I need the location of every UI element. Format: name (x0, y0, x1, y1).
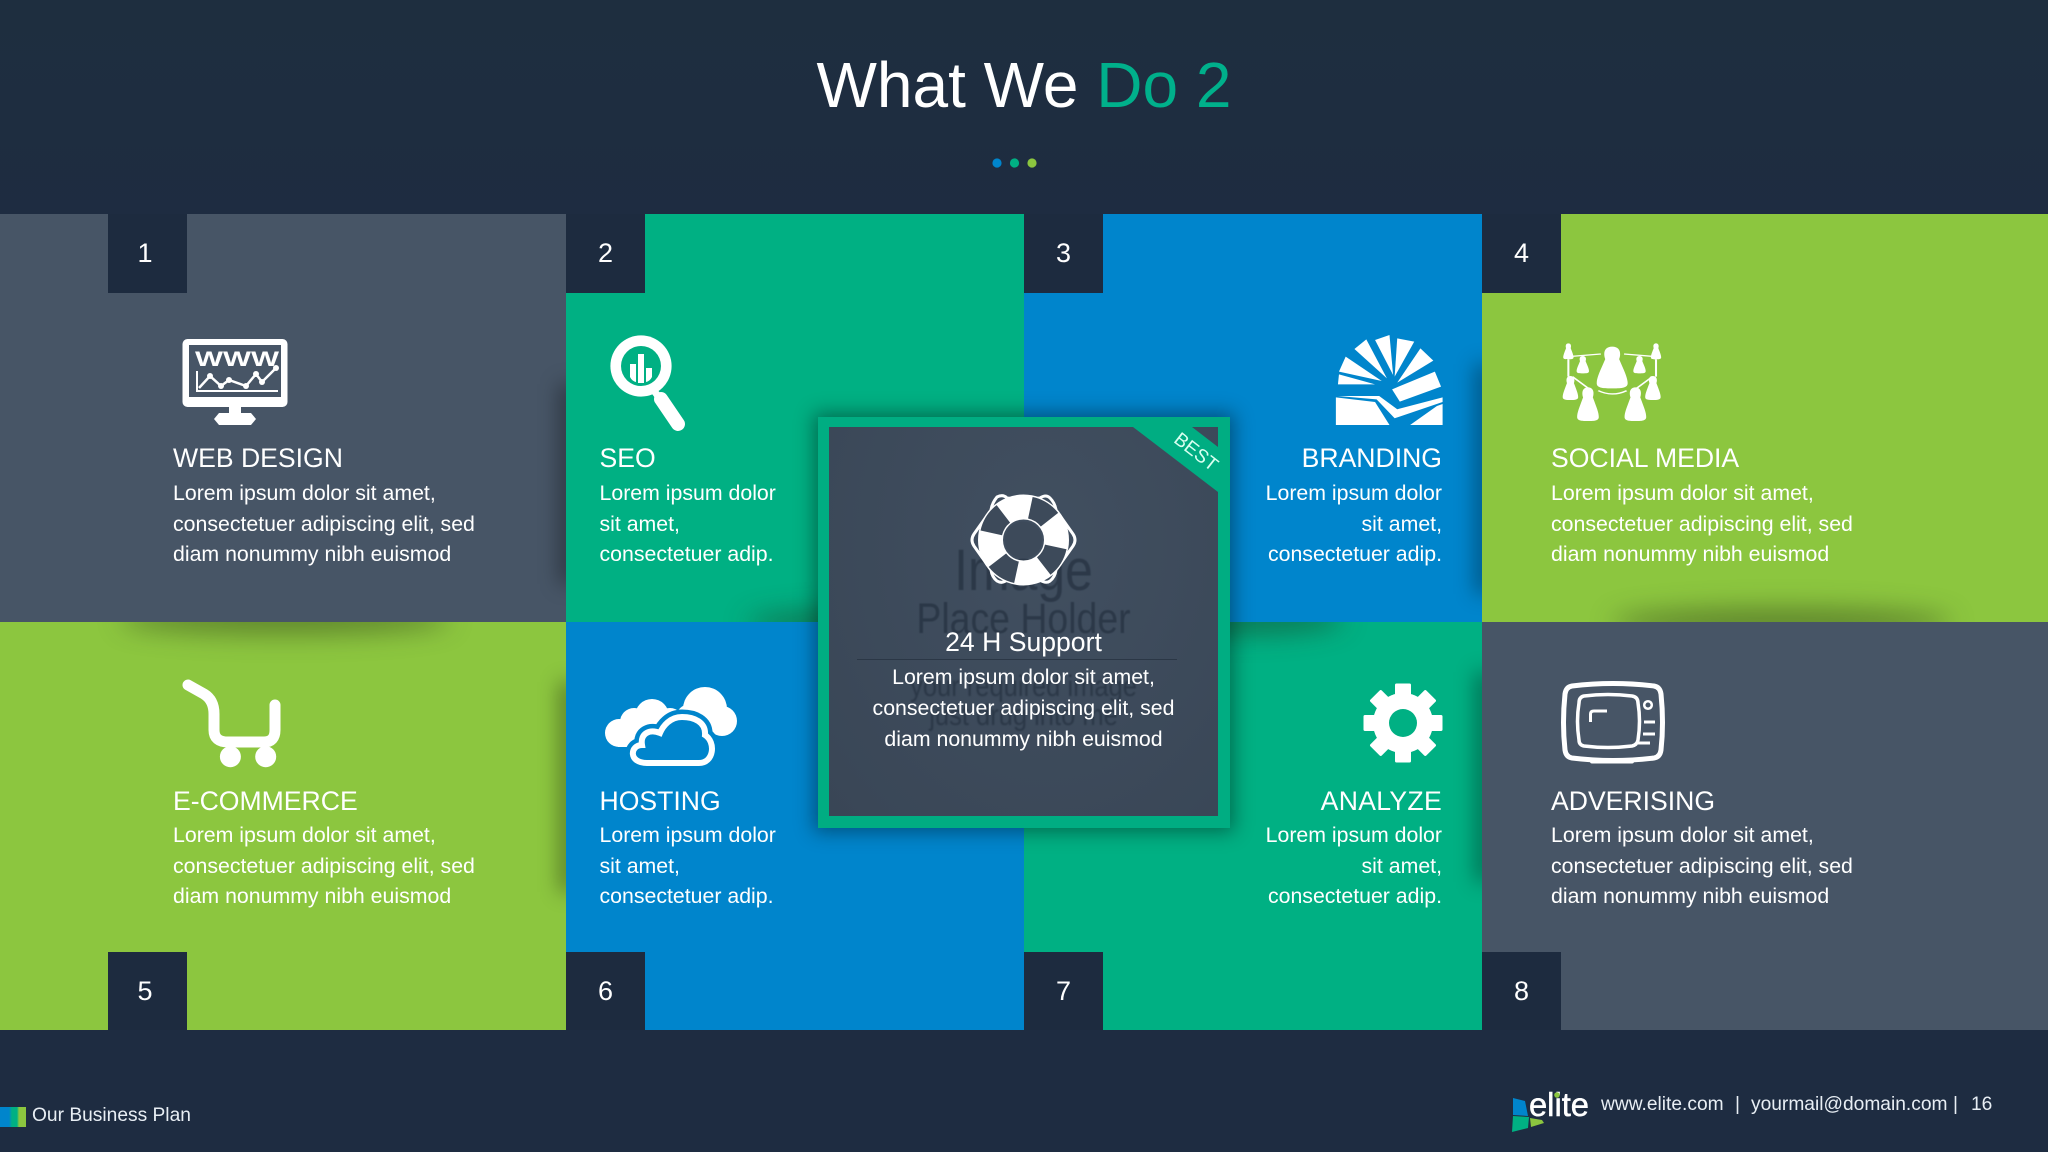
placeholder image text: Image (954, 538, 1093, 603)
number badge 4: 4 (1514, 238, 1529, 268)
placeholder image subtitle: Place Holder (916, 595, 1131, 643)
footer website: www.elite.com (1601, 1094, 1724, 1115)
body text: diam nonummy nibh euismod (1551, 884, 1829, 908)
card divider (857, 659, 1177, 660)
body text: sit amet, (600, 512, 680, 536)
body text: consectetuer adip. (1268, 542, 1442, 566)
logo: elite (1512, 1086, 1589, 1132)
panel: hosting (566, 622, 1024, 1030)
icon: www monitor (182, 339, 288, 425)
placeholder image hint: your required image (910, 670, 1137, 703)
icon: www monitor: WWW (195, 348, 279, 371)
icon: lifebuoy (970, 494, 1076, 586)
number badge 6 (566, 952, 645, 1030)
body text: sit amet, (600, 854, 680, 878)
title: What We Do 2 (817, 49, 1231, 121)
body text: Lorem ipsum dolor sit amet, (1551, 823, 1814, 847)
icon: retro tv (1561, 681, 1665, 764)
body text (1266, 823, 1442, 908)
icon: gear (1364, 684, 1442, 762)
body text (1551, 823, 1853, 908)
placeholder image hint: just drug into me (929, 699, 1118, 732)
panel: social media (1482, 214, 2048, 622)
body text: Lorem ipsum dolor sit amet, (173, 481, 436, 505)
placeholder image hint (910, 670, 1137, 732)
footer separator: | (1735, 1094, 1740, 1115)
decorative three dots (992, 158, 1037, 168)
number badge 5: 5 (137, 976, 153, 1006)
heading: ANALYZE (1321, 786, 1442, 816)
body text: consectetuer adip. (600, 542, 774, 566)
body text: consectetuer adip. (1268, 884, 1442, 908)
heading: E-COMMERCE (173, 786, 358, 816)
body text: Lorem ipsum dolor (600, 823, 776, 847)
body text: diam nonummy nibh euismod (1551, 542, 1829, 566)
body text: Lorem ipsum dolor sit amet, (1551, 481, 1814, 505)
body text: Lorem ipsum dolor (1266, 481, 1442, 505)
number badge 7 (1024, 952, 1103, 1030)
card body text: consectetuer adipiscing elit, sed (873, 696, 1174, 720)
ribbon: best (1133, 427, 1222, 492)
body text: Lorem ipsum dolor (1266, 823, 1442, 847)
body text: consectetuer adipiscing elit, sed (1551, 512, 1853, 536)
panel: e-commerce (0, 622, 566, 1030)
number badge 3: 3 (1056, 238, 1071, 268)
panel: web design (0, 214, 566, 622)
body text: consectetuer adipiscing elit, sed (173, 854, 475, 878)
panel: branding (1024, 214, 1482, 622)
logo: elite: elite (1529, 1086, 1589, 1123)
card body text: diam nonummy nibh euismod (884, 727, 1163, 751)
panel: center 24 h support card (818, 417, 1230, 828)
body text: Lorem ipsum dolor sit amet, (173, 823, 436, 847)
icon: clouds (605, 687, 737, 766)
heading: SEO (600, 443, 656, 473)
body text (173, 823, 475, 908)
ribbon: best: BEST (1170, 429, 1222, 476)
card body text (873, 665, 1174, 751)
number badge 2 (566, 214, 645, 293)
panel: analyze (1024, 622, 1482, 1030)
number badge 2: 2 (598, 238, 613, 268)
body text: sit amet, (1362, 512, 1442, 536)
heading: WEB DESIGN (173, 443, 343, 473)
footer separator: | (1953, 1094, 1958, 1115)
body text: diam nonummy nibh euismod (173, 542, 451, 566)
body text: Lorem ipsum dolor (600, 481, 776, 505)
icon: magnifier (610, 335, 685, 431)
body text (1551, 481, 1853, 566)
body text: sit amet, (1362, 854, 1442, 878)
panel: seo (566, 214, 1024, 622)
heading: BRANDING (1302, 443, 1442, 473)
icon: fan and book (1336, 335, 1443, 425)
body text (600, 481, 776, 566)
icon: shopping cart (182, 680, 280, 768)
number badge 6: 6 (598, 976, 613, 1006)
body text: diam nonummy nibh euismod (173, 884, 451, 908)
number badge 7: 7 (1056, 976, 1071, 1006)
footer swatch (0, 1107, 26, 1127)
body text (173, 481, 475, 566)
icon: people network (1562, 343, 1662, 421)
body text: consectetuer adipiscing elit, sed (173, 512, 475, 536)
footer label: Our Business Plan (32, 1105, 191, 1126)
heading: SOCIAL MEDIA (1551, 443, 1739, 473)
number badge 1: 1 (137, 238, 153, 268)
panel: advertising (1482, 622, 2048, 1030)
body text: consectetuer adip. (600, 884, 774, 908)
number badge 4 (1482, 214, 1561, 293)
footer email: yourmail@domain.com (1751, 1094, 1948, 1115)
number badge 8: 8 (1514, 976, 1529, 1006)
body text (1266, 481, 1442, 566)
page number: 16 (1971, 1094, 1992, 1115)
number badge 5 (108, 952, 187, 1030)
body text: consectetuer adipiscing elit, sed (1551, 854, 1853, 878)
number badge 3 (1024, 214, 1103, 293)
heading: ADVERISING (1551, 786, 1715, 816)
number badge 8 (1482, 952, 1561, 1030)
number badge 1 (108, 214, 187, 293)
heading: HOSTING (600, 786, 721, 816)
card heading: 24 H Support (945, 627, 1102, 657)
card body text: Lorem ipsum dolor sit amet, (892, 665, 1155, 689)
body text (600, 823, 776, 908)
